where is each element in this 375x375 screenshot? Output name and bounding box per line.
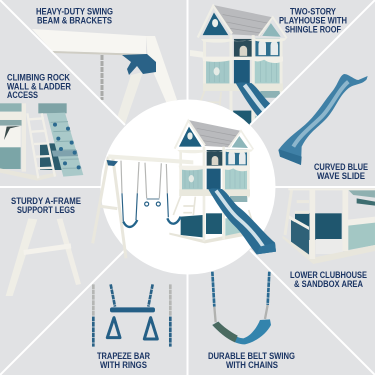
panel: two-story playhouse [190,4,346,126]
heading: trapeze: TRAPEZE BAR [97,351,150,362]
image: a-frame [6,218,81,296]
heading: belt swing: DURABLE BELT SWING [208,351,295,362]
image: trapeze and rings [93,284,170,347]
swing frame [93,154,193,258]
heading: slide [314,162,368,182]
heading: playhouse: PLAYHOUSE WITH [279,16,347,26]
heading: climbing wall: CLIMBING ROCK [7,72,70,84]
heading: climbing wall: ACCESS [7,90,38,101]
panel: belt swing [208,272,295,371]
panel: swing beam and brackets [32,6,177,124]
heading: swing beam: HEAVY-DUTY SWING [36,6,113,18]
heading: trapeze [97,351,150,371]
heading: climbing wall [7,72,71,101]
panel: a-frame legs [6,196,81,296]
heading: playhouse [279,6,347,36]
panel: climbing wall [0,72,83,181]
heading: playhouse: SHINGLE ROOF [285,24,341,36]
heading: a-frame: SUPPORT LEGS [17,205,75,216]
heading: belt swing: WITH CHAINS [226,360,278,371]
panel: curved wave slide [278,74,368,182]
heading: slide: WAVE SLIDE [317,171,365,182]
image: clubhouse and sandbox [283,188,375,264]
image: blue slide [278,74,368,165]
image: playhouse [190,4,287,126]
heading: swing beam: BEAM & BRACKETS [37,16,112,26]
image: complete swing set and playhouse [93,120,276,258]
heading: belt swing [208,351,295,371]
heading: trapeze: WITH RINGS [100,360,147,371]
heading: climbing wall: WALL & LADDER [7,82,71,92]
panel: trapeze bar [93,284,170,371]
center circle: full playset [93,100,276,274]
heading: a-frame: STURDY A-FRAME [11,196,81,207]
image: belt swing [212,272,271,344]
image: rock wall and ladder [0,103,83,181]
heading: a-frame [11,196,81,216]
heading: swing beam [36,6,113,26]
image: swing beam [32,29,177,124]
heading: clubhouse [290,270,367,290]
heading: playhouse: TWO-STORY [290,6,337,18]
panel: lower clubhouse [283,188,375,290]
